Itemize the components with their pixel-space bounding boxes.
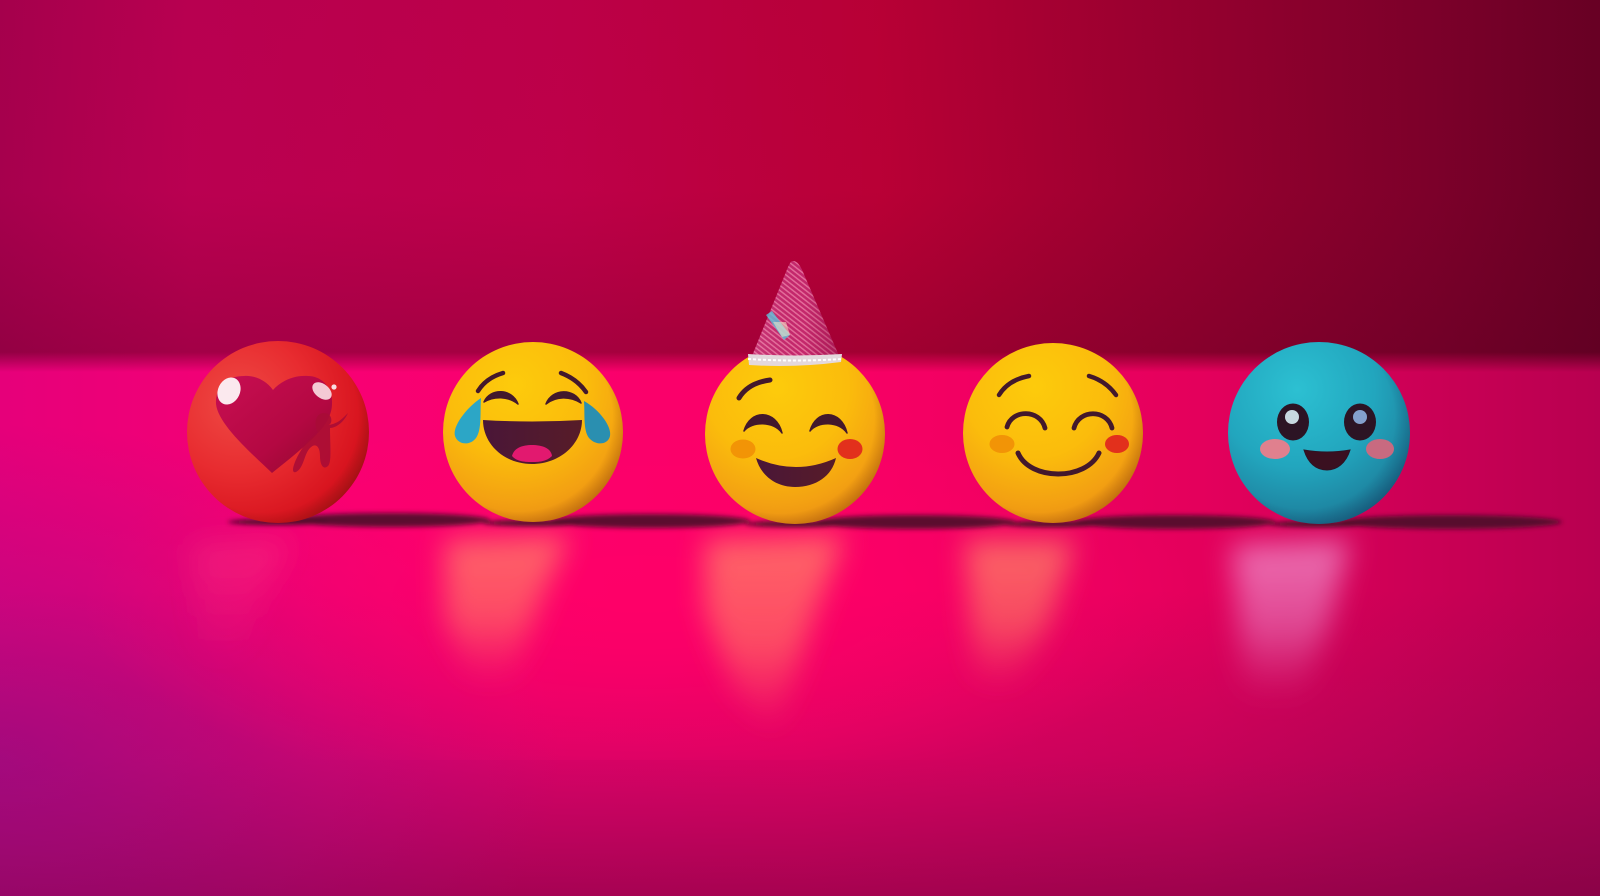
floor reflections of the balls [192, 535, 1350, 735]
eyebrows [999, 376, 1116, 395]
cheeks [730, 439, 862, 459]
background wall [0, 0, 1600, 380]
smile [1018, 453, 1099, 474]
ball: party smile [705, 261, 885, 524]
tears [455, 398, 610, 443]
ball: blue cute face [1228, 342, 1410, 524]
cheeks [1260, 439, 1394, 459]
eyes [1277, 404, 1376, 440]
glossy pink floor [0, 340, 1600, 896]
mouth [756, 458, 836, 487]
mouth [1304, 450, 1350, 470]
ball: laughing with tears [443, 342, 623, 522]
open mouth [483, 420, 582, 464]
closed happy eyes [1007, 414, 1112, 428]
contact shadows [228, 513, 1562, 529]
ball: red heart [187, 341, 369, 523]
eyebrows [478, 373, 586, 392]
cheeks [990, 435, 1129, 453]
eyebrow [739, 380, 770, 398]
closed happy eyes [744, 415, 847, 433]
heart highlights [213, 374, 337, 408]
closed laughing eyes [484, 392, 581, 404]
icon: heart [216, 376, 332, 473]
ball: gentle smile [963, 343, 1143, 523]
drip and arm on heart [293, 413, 348, 472]
party hat [748, 261, 842, 366]
